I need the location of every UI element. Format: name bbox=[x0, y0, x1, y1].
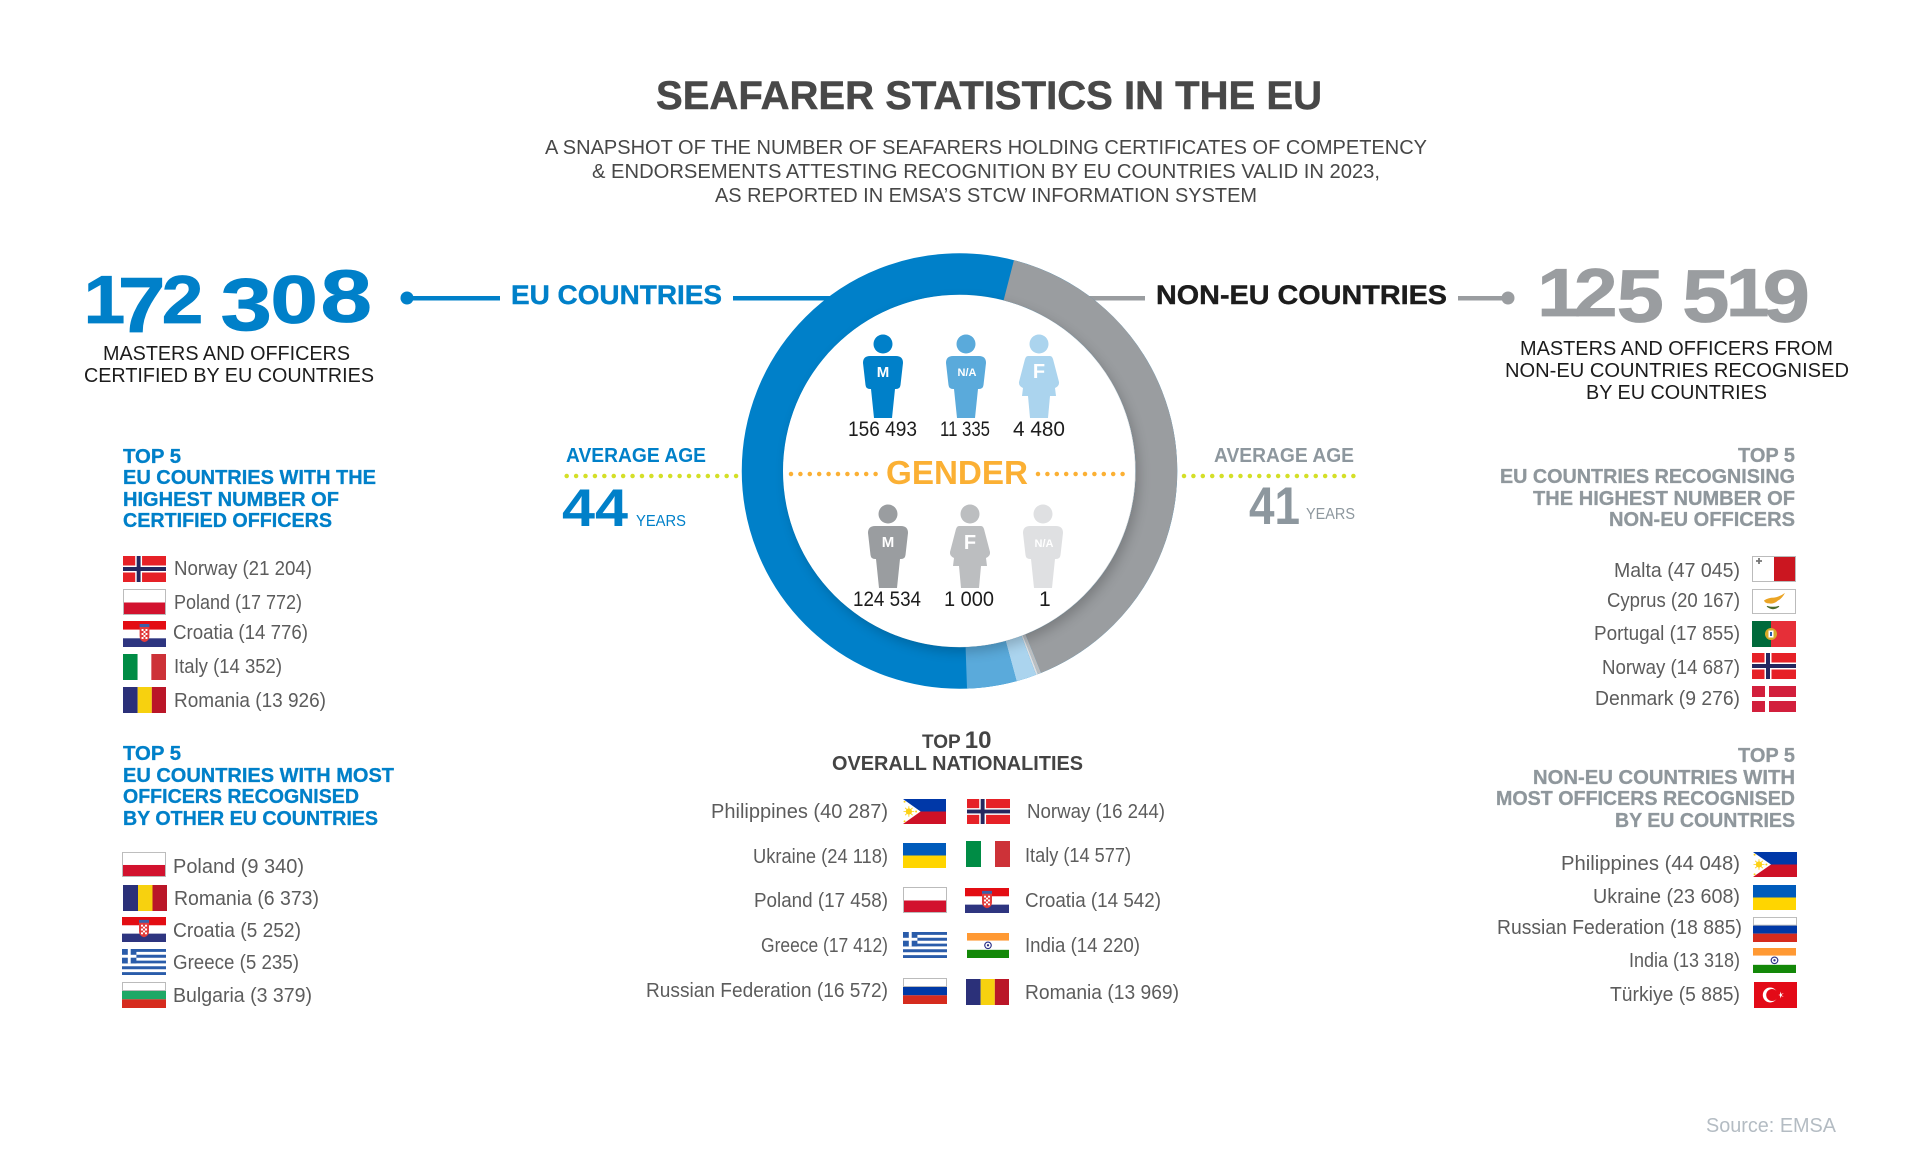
average age: non-EU bbox=[1184, 445, 1356, 536]
row: India: India (13 318) bbox=[1629, 950, 1740, 972]
row: Bulgaria bbox=[122, 982, 312, 1008]
average age: EU: YEARS bbox=[636, 513, 686, 530]
heading: EU countries: EU COUNTRIES bbox=[511, 280, 722, 310]
non-EU total number: 5 bbox=[1617, 255, 1688, 338]
person: non-EU male: M bbox=[882, 534, 894, 551]
subtitle: A SNAPSHOT OF THE NUMBER OF SEAFARERS HOLDING CERTIFICATES OF COMPETENCY bbox=[545, 137, 1427, 159]
donut chart bbox=[762, 274, 1156, 668]
row: Italy bbox=[123, 654, 282, 680]
heading: OVERALL NATIONALITIES bbox=[832, 753, 1083, 775]
heading: TOP 5 bbox=[1738, 445, 1795, 467]
panel: top 5 recognising non-EU bbox=[1500, 445, 1796, 712]
row: India bbox=[1629, 948, 1796, 973]
row: Philippines bbox=[711, 799, 946, 824]
EU total number: 3 bbox=[220, 263, 272, 346]
row: Croatia bbox=[123, 621, 308, 647]
row: Greece: Greece (5 235) bbox=[173, 952, 299, 974]
heading: EU COUNTRIES WITH MOST bbox=[123, 765, 394, 787]
row: Romania bbox=[966, 979, 1179, 1005]
non-EU total number: 1 bbox=[1726, 255, 1769, 331]
subtitle bbox=[545, 137, 1427, 207]
row: Poland: Poland (9 340) bbox=[173, 856, 304, 878]
row: Romania: Romania (13 969) bbox=[1025, 982, 1179, 1004]
row: Philippines bbox=[1561, 852, 1797, 877]
row: Ukraine: Ukraine (23 608) bbox=[1593, 886, 1740, 908]
EU total number: 8 bbox=[320, 255, 372, 338]
heading: EU COUNTRIES RECOGNISING bbox=[1500, 466, 1795, 488]
average age: EU: AVERAGE AGE bbox=[566, 445, 706, 467]
heading: HIGHEST NUMBER OF bbox=[123, 489, 339, 511]
person: non-EU not available bbox=[1023, 504, 1063, 588]
row: Croatia: Croatia (5 252) bbox=[173, 920, 301, 942]
person: non-EU not available: N/A bbox=[1035, 538, 1054, 550]
heading: TOP10 bbox=[922, 727, 991, 754]
row: India: India (14 220) bbox=[1025, 935, 1140, 957]
row: Russian Federation: Russian Federation (16 572) bbox=[646, 980, 888, 1002]
person: EU not available: N/A bbox=[958, 367, 977, 379]
row: Norway: Norway (14 687) bbox=[1602, 657, 1740, 679]
heading bbox=[1496, 745, 1795, 832]
row: Malta bbox=[1614, 556, 1796, 582]
row: Denmark: Denmark (9 276) bbox=[1595, 688, 1740, 710]
row: Norway: Norway (21 204) bbox=[174, 558, 312, 580]
title: SEAFARER STATISTICS IN THE EU bbox=[656, 74, 1322, 118]
row: Greece: Greece (17 412) bbox=[761, 935, 888, 957]
row: Italy: Italy (14 577) bbox=[1025, 845, 1131, 867]
gender label: GENDER bbox=[886, 454, 1028, 491]
row: Ukraine: Ukraine (24 118) bbox=[753, 846, 888, 868]
row: Denmark bbox=[1595, 686, 1796, 712]
row: Norway bbox=[1602, 653, 1796, 679]
row: Malta: Malta (47 045) bbox=[1614, 560, 1740, 582]
row: Philippines: Philippines (40 287) bbox=[711, 801, 888, 823]
non-EU total number: 9 bbox=[1763, 255, 1810, 338]
heading: EU COUNTRIES WITH THE bbox=[123, 467, 376, 489]
row: Russian Federation: Russian Federation (18 885) bbox=[1497, 917, 1742, 939]
EU total number: 7 bbox=[118, 263, 165, 349]
heading: BY EU COUNTRIES bbox=[1615, 810, 1795, 832]
row: Croatia: Croatia (14 542) bbox=[1025, 890, 1161, 912]
row: Greece bbox=[122, 949, 299, 975]
subtitle: & ENDORSEMENTS ATTESTING RECOGNITION BY EU COUNTRIES VALID IN 2023, bbox=[592, 161, 1380, 183]
row: Romania bbox=[123, 687, 326, 713]
row: Ukraine bbox=[1593, 885, 1796, 910]
heading: TOP 5 bbox=[123, 743, 181, 765]
non-EU total number: 1 bbox=[1537, 255, 1581, 331]
average age: non-EU: YEARS bbox=[1306, 506, 1355, 523]
count: non-EU female: 1 000 bbox=[944, 588, 994, 611]
count: non-EU not available: 1 bbox=[1039, 588, 1051, 611]
row: Italy: Italy (14 352) bbox=[174, 656, 282, 678]
panel: top 10 nationalities bbox=[646, 727, 1179, 1005]
row: Ukraine bbox=[753, 843, 946, 868]
EU total caption: MASTERS AND OFFICERS bbox=[103, 343, 350, 365]
row: Türkiye bbox=[1610, 982, 1797, 1008]
row: Poland: Poland (17 458) bbox=[754, 890, 888, 912]
panel: top 5 EU recognised bbox=[122, 743, 394, 1008]
source: Source: EMSA bbox=[1706, 1115, 1837, 1137]
panel: top 5 EU certified bbox=[123, 446, 376, 713]
row: Croatia: Croatia (14 776) bbox=[173, 622, 308, 644]
non-EU total caption bbox=[1505, 338, 1849, 404]
person: non-EU female bbox=[950, 504, 990, 588]
row: Türkiye: Türkiye (5 885) bbox=[1610, 984, 1740, 1006]
row: Portugal bbox=[1594, 621, 1796, 647]
row: Croatia bbox=[965, 888, 1161, 913]
row: Portugal: Portugal (17 855) bbox=[1594, 623, 1740, 645]
row: Poland bbox=[123, 589, 302, 615]
EU total number: 1 bbox=[84, 262, 125, 338]
person: EU female: F bbox=[1033, 361, 1045, 383]
connector: non-EU right bbox=[1458, 292, 1514, 304]
heading: MOST OFFICERS RECOGNISED bbox=[1496, 788, 1795, 810]
person: EU male bbox=[863, 334, 903, 418]
count: non-EU male: 124 534 bbox=[853, 588, 921, 611]
row: Norway: Norway (16 244) bbox=[1027, 801, 1165, 823]
count: EU male: 156 493 bbox=[848, 418, 917, 441]
heading: OFFICERS RECOGNISED bbox=[123, 786, 359, 808]
average age: EU bbox=[562, 445, 738, 538]
row: Cyprus: Cyprus (20 167) bbox=[1607, 590, 1740, 612]
EU total number: 0 bbox=[270, 262, 318, 338]
row: India bbox=[967, 933, 1140, 958]
row: Poland bbox=[754, 887, 947, 913]
row: Philippines: Philippines (44 048) bbox=[1561, 853, 1740, 875]
subtitle: AS REPORTED IN EMSA’S STCW INFORMATION SYSTEM bbox=[715, 185, 1257, 207]
panel: top 5 non-EU bbox=[1496, 745, 1797, 1008]
average age: non-EU: AVERAGE AGE bbox=[1214, 445, 1354, 467]
person: EU female bbox=[1019, 334, 1059, 418]
connector: EU left bbox=[400, 292, 500, 304]
row: Romania bbox=[123, 885, 319, 911]
EU total caption: CERTIFIED BY EU COUNTRIES bbox=[84, 365, 374, 387]
heading bbox=[123, 446, 376, 532]
heading: BY OTHER EU COUNTRIES bbox=[123, 808, 378, 830]
EU total number: 2 bbox=[162, 262, 203, 338]
heading: TOP 5 bbox=[1738, 745, 1795, 767]
average age: EU: 44 bbox=[562, 479, 629, 538]
row: Croatia bbox=[122, 917, 301, 942]
heading: THE HIGHEST NUMBER OF bbox=[1533, 488, 1795, 510]
row: Norway bbox=[967, 799, 1165, 824]
heading: TOP 5 bbox=[123, 446, 181, 468]
person: EU not available bbox=[946, 334, 986, 418]
row: Greece bbox=[761, 932, 947, 958]
heading: CERTIFIED OFFICERS bbox=[123, 510, 332, 532]
non-EU total caption: NON-EU COUNTRIES RECOGNISED bbox=[1505, 360, 1849, 382]
person: non-EU female: F bbox=[964, 532, 976, 554]
average age: non-EU: 41 bbox=[1249, 477, 1300, 536]
count: EU not available: 11 335 bbox=[940, 418, 990, 441]
EU total caption bbox=[84, 343, 374, 387]
heading: NON-EU OFFICERS bbox=[1609, 509, 1795, 531]
row: Romania: Romania (6 373) bbox=[174, 888, 319, 910]
row: Cyprus bbox=[1607, 589, 1796, 614]
non-EU total caption: BY EU COUNTRIES bbox=[1586, 382, 1767, 404]
heading bbox=[832, 727, 1083, 775]
row: Poland: Poland (17 772) bbox=[174, 592, 302, 614]
row: Bulgaria: Bulgaria (3 379) bbox=[173, 985, 312, 1007]
count: EU female: 4 480 bbox=[1013, 418, 1065, 441]
heading: non-EU countries: NON-EU COUNTRIES bbox=[1156, 280, 1447, 310]
heading bbox=[1500, 445, 1795, 531]
row: Italy bbox=[966, 841, 1131, 867]
row: Romania: Romania (13 926) bbox=[174, 690, 326, 712]
EU total number bbox=[84, 255, 372, 349]
non-EU total number: 5 bbox=[1682, 255, 1729, 338]
connector: EU right bbox=[733, 296, 838, 300]
connector: non-EU left bbox=[1085, 296, 1145, 300]
row: Norway bbox=[123, 556, 312, 582]
non-EU total number: 2 bbox=[1574, 255, 1618, 331]
heading bbox=[123, 743, 394, 830]
row: Poland bbox=[122, 852, 304, 878]
person: EU male: M bbox=[877, 364, 889, 381]
heading: NON-EU COUNTRIES WITH bbox=[1533, 767, 1795, 789]
person: non-EU male bbox=[868, 504, 908, 588]
non-EU total caption: MASTERS AND OFFICERS FROM bbox=[1520, 338, 1833, 360]
